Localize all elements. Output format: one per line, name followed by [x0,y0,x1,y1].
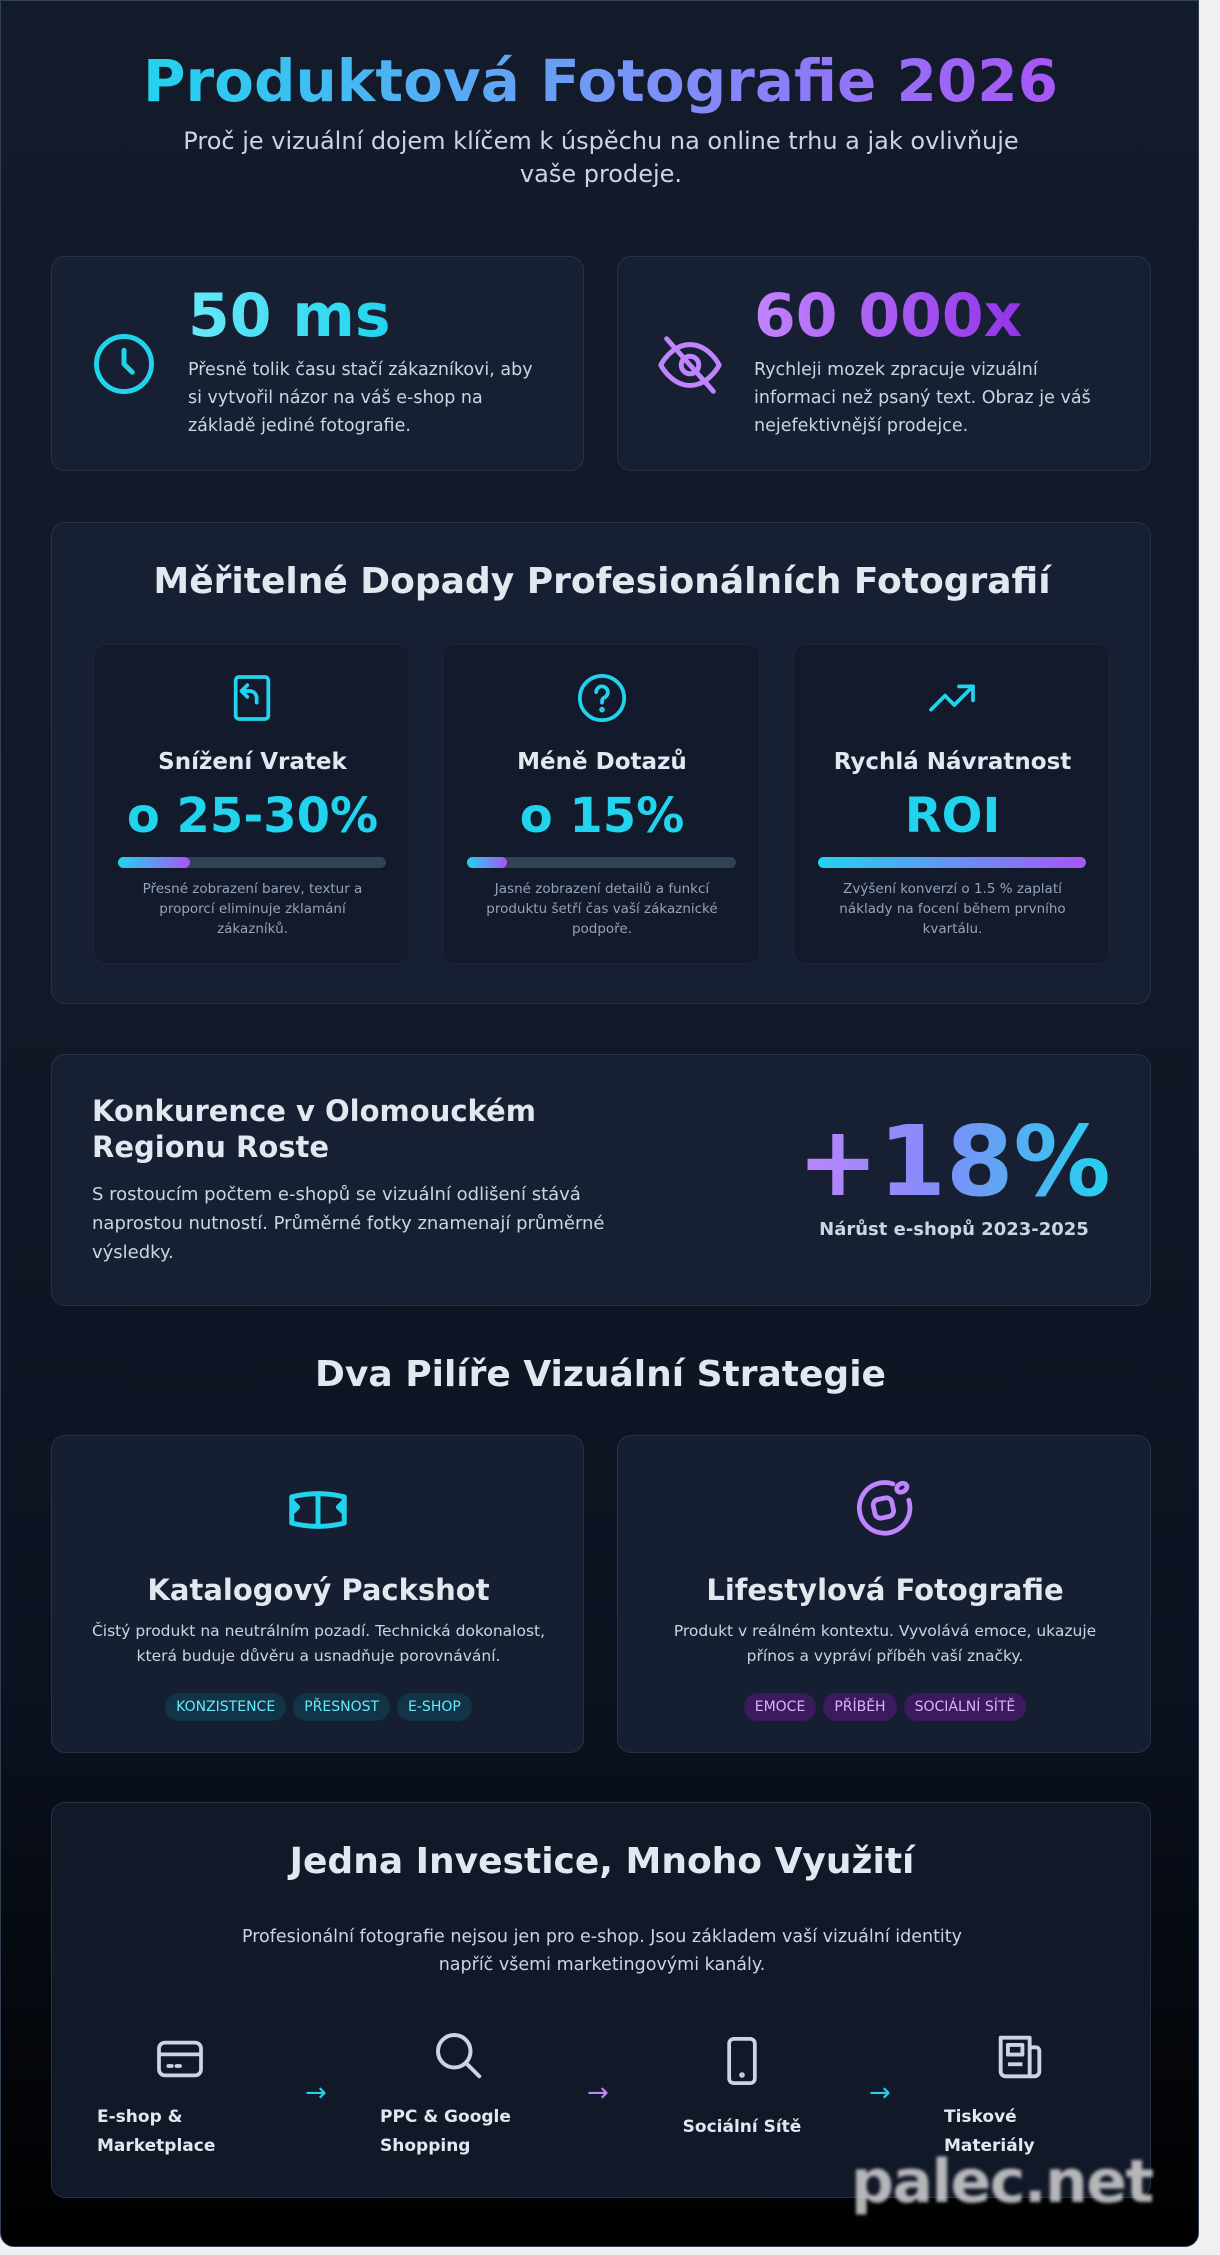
label [380,2107,511,2156]
heading: two pillars: Dva Pilíře Vizuální Strategie [315,1354,886,1395]
panel: one investment many uses [51,1802,1151,2198]
panel: 50 ms stat [51,256,584,471]
tags: PŘÍBĚH [834,1699,886,1715]
description: Zvýšení konverzí o 1.5 % zaplatí náklady na focení během prvního kvartálu. [839,881,1066,937]
label: Tiskové [944,2107,1017,2127]
panel: measurable impacts [51,522,1151,1004]
panel: 60 000x stat [617,256,1151,471]
icon: lifestyle camera [856,1480,912,1536]
description: S rostoucím počtem e-shopů se vizuální odlišení stává naprostou nutností. Průměrné fotky znamenají průměrné výsledky. [92,1184,605,1263]
stat description: informaci než psaný text. Obraz je váš [754,388,1091,408]
panel: lifestyle [617,1435,1151,1753]
label: Rychlá Návratnost [834,749,1071,775]
label: Materiály [944,2136,1035,2156]
subtitle: vaše prodeje. [520,160,682,188]
arrow: → [869,2078,891,2108]
tags: E-SHOP [408,1699,461,1715]
heading: Měřitelné Dopady Profesionálních Fotografií [153,561,1051,602]
big stat +18%: +18% [797,1105,1111,1218]
stat description: si vytvořil názor na váš e-shop na [188,388,483,408]
value: o 25-30% [127,788,378,844]
subtitle [183,127,1019,188]
icon: return [234,675,270,721]
stat caption: Nárůst e-shopů 2023-2025 [819,1219,1089,1240]
stat description [188,360,533,436]
panel: packshot [51,1435,584,1753]
icon: newspaper [998,2036,1042,2078]
icon: question [578,674,626,722]
channel: e-shop [97,2040,215,2156]
icon: eye off [658,336,722,394]
panel: regional competition [51,1054,1151,1306]
stat description [754,360,1091,436]
channel: PPC [380,2033,511,2156]
subcard: fewer questions [442,644,760,964]
icon: trending up [929,684,975,712]
stat value: 50 ms: 50 ms [188,281,391,351]
subtitle: Proč je vizuální dojem klíčem k úspěchu na online trhu a jak ovlivňuje [183,127,1019,155]
progress bar [118,857,386,868]
stat description: Rychleji mozek zpracuje vizuální [754,360,1038,380]
stat description: základě jediné fotografie. [188,416,411,436]
value: ROI [905,788,1000,844]
stat description: nejefektivnější prodejce. [754,416,968,436]
channel: social [683,2037,801,2137]
tags: SOCIÁLNÍ SÍTĚ [915,1699,1015,1715]
heading: Jedna Investice, Mnoho Využití [290,1841,914,1882]
heading: Katalogový Packshot [147,1573,490,1607]
icon: card [157,2040,203,2078]
description: Jasné zobrazení detailů a funkcí produktu šetří čas vaší zákaznické podpoře. [486,881,718,937]
stat description: Přesně tolik času stačí zákazníkovi, aby [188,360,533,380]
description: Přesné zobrazení barev, textur a proporcí eliminuje zklamání zákazníků. [143,881,362,937]
label: Méně Dotazů [517,749,687,775]
tags: KONZISTENCE [176,1699,275,1715]
label [944,2107,1035,2156]
icon: search [436,2033,482,2078]
label [97,2107,215,2156]
tags [165,1693,472,1721]
progress bar [467,857,736,868]
tags [744,1693,1026,1721]
label: Marketplace [97,2136,215,2156]
label: Snížení Vratek [158,749,347,775]
icon: packshot box [289,1491,347,1529]
icon: clock [94,334,154,394]
value: o 15% [520,788,684,844]
description: Produkt v reálném kontextu. Vyvolává emoce, ukazuje přínos a vypráví příběh vaší značky. [674,1622,1096,1665]
label: PPC & Google [380,2107,511,2127]
label: Sociální Sítě [683,2117,801,2137]
title: Produktová Fotografie 2026 [143,47,1058,115]
tags: EMOCE [755,1699,805,1715]
subcard: returns [93,644,410,964]
channel: print [944,2036,1042,2156]
heading: Lifestylová Fotografie [706,1573,1064,1607]
arrow: → [305,2078,327,2108]
description: Profesionální fotografie nejsou jen pro e-shop. Jsou základem vaší vizuální identity napříč všemi marketingovými kanály. [242,1927,962,1975]
progress bar [818,857,1086,868]
label: Shopping [380,2136,470,2156]
tags: PŘESNOST [304,1699,379,1715]
stat value: 60 000x: 60 000x [754,281,1022,351]
heading: Konkurence v Olomouckém Regionu Roste [92,1094,536,1164]
arrow: → [587,2078,609,2108]
subcard: ROI [793,644,1110,964]
icon: phone [727,2037,757,2085]
watermark: palec.net [851,2147,1153,2217]
label: E-shop & [97,2107,182,2127]
description: Čistý produkt na neutrálním pozadí. Technická dokonalost, která buduje důvěru a usnadňuje porovnávání. [92,1622,545,1665]
